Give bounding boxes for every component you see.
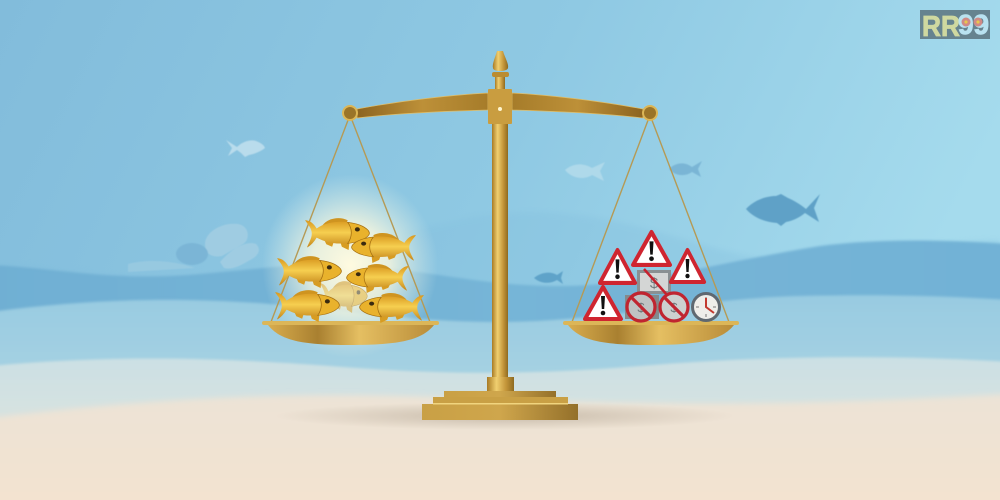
scale: stepped base xyxy=(422,391,578,420)
clock xyxy=(692,294,720,320)
warning triangle bottom xyxy=(585,287,621,319)
wave: sand floor xyxy=(0,394,1000,500)
silhouette: small fish near bottom xyxy=(534,271,563,284)
right pan xyxy=(563,321,739,345)
scale: right beam arm xyxy=(512,93,643,118)
left pan strings xyxy=(271,115,430,322)
gold fish pile xyxy=(275,218,424,323)
left pan xyxy=(262,321,439,345)
silhouette: fish centre right xyxy=(565,162,605,181)
fish middle right xyxy=(347,264,409,293)
warnings and crossed-out money pile xyxy=(585,232,720,321)
silhouette: large fish right xyxy=(746,194,820,226)
fish upper right xyxy=(352,233,416,263)
scale: central hub xyxy=(488,89,512,124)
silhouette: coral left xyxy=(128,224,259,272)
prohibited coin left: $ xyxy=(637,300,645,315)
scale: left pivot xyxy=(343,106,357,120)
glow behind gold fish xyxy=(262,174,438,358)
wave: deep blue band xyxy=(0,240,1000,500)
wave: light blue band xyxy=(0,295,1000,500)
right pan strings xyxy=(572,115,729,322)
banknote top: $ xyxy=(650,275,659,292)
scale: central pole xyxy=(487,118,514,392)
fish top xyxy=(305,218,369,250)
warning triangle top xyxy=(633,232,670,265)
faded centre fish xyxy=(320,281,367,313)
prohibited coin right: $ xyxy=(670,300,678,315)
scale: finial xyxy=(492,51,509,93)
silhouette: small fish far right xyxy=(669,161,702,177)
silhouette: fish top left xyxy=(226,140,265,157)
fish bottom left xyxy=(275,290,339,322)
wave: pale sand shallows xyxy=(0,357,1000,500)
banknote bottom xyxy=(625,295,659,319)
warning triangle left xyxy=(600,250,635,283)
scale: right pivot xyxy=(643,106,657,120)
scale: left beam arm xyxy=(357,93,488,118)
fish bottom right xyxy=(360,293,424,323)
warning triangle right xyxy=(671,250,704,282)
watermark logo: RR xyxy=(922,11,960,43)
fish middle left xyxy=(277,256,341,288)
scale shadow on sand xyxy=(275,402,735,430)
watermark logo xyxy=(920,9,990,43)
watermark logo: 99 xyxy=(958,9,989,40)
